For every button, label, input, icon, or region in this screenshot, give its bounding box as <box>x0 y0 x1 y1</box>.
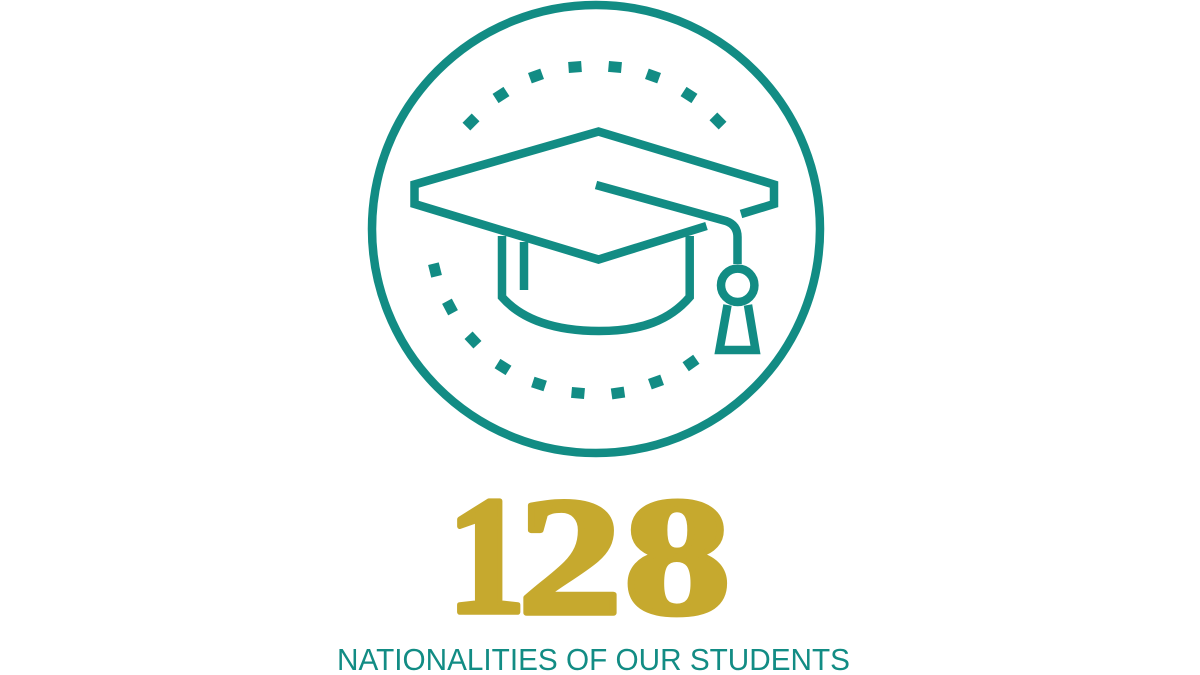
big number: 128 <box>447 463 731 650</box>
icon: graduation cap badge <box>372 5 820 453</box>
dotted arc: lower <box>428 262 699 399</box>
dotted arc: upper <box>463 61 726 130</box>
tassel fringe <box>720 305 756 350</box>
tassel knot <box>721 269 754 302</box>
big number: 128: 8 <box>624 463 731 650</box>
big number: 128: 1 <box>447 464 526 649</box>
tassel cord <box>596 185 738 264</box>
outer circle <box>372 5 820 453</box>
cap crown <box>502 236 690 331</box>
cap board <box>414 132 774 260</box>
big number: 128: 2 <box>518 463 622 649</box>
crown inner stripe <box>520 242 528 290</box>
